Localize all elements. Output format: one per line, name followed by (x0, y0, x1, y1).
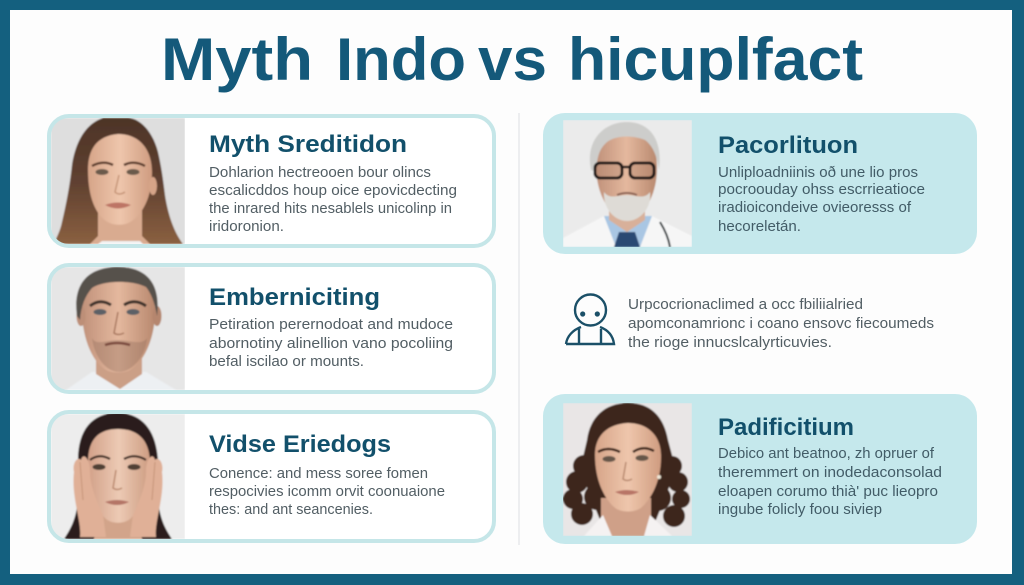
body text (209, 317, 453, 370)
body text: theremmert on inodedaconsolad (718, 465, 942, 481)
panel: myth card 2 (49, 265, 494, 392)
title (161, 26, 863, 93)
body text: iridoronion. (209, 219, 284, 235)
body text (209, 466, 445, 518)
body text: respocivies icomm orvit coonuaione (209, 484, 445, 500)
callout text (628, 297, 934, 351)
portrait: older doctor with glasses (563, 120, 692, 247)
body text (718, 446, 942, 518)
title: hicuplfact (568, 26, 863, 93)
body text (718, 165, 925, 235)
icon: person outline (566, 294, 614, 344)
portrait: woman with curly hair (563, 403, 692, 536)
callout text: Urpcocrionaclimed a occ fbiliialried (628, 297, 863, 313)
body text: Petiration perernodoat and mudoce (209, 317, 453, 333)
panel: fact card 1 (543, 113, 977, 254)
body text: Dohlarion hectreooen bour olincs (209, 165, 431, 181)
body text: Debico ant beatnoo, zh opruer of (718, 446, 935, 462)
portrait: middle-aged man with stubble (51, 267, 185, 390)
body text: Conence: and mess soree fomen (209, 466, 428, 482)
panel: myth card 3 (49, 412, 494, 541)
callout: centre note (566, 294, 934, 351)
body text: escalicddos houp oice epovicdecting (209, 183, 457, 199)
callout text: apomconamrionc i coano ensovc fiecoumeds (628, 316, 934, 332)
heading: Myth Sreditidon (209, 131, 407, 158)
title: Indo (336, 26, 466, 93)
body text: pocroouday ohss escrrieatioce (718, 182, 925, 198)
body text: Unliploadniinis oð une lio pros (718, 165, 918, 181)
body text: befal iscilao or mounts. (209, 354, 364, 370)
panel: fact card 2 (543, 394, 977, 544)
portrait: young woman with long brown hair (51, 118, 185, 244)
body text: the inrared hits nesablels unicolinp in (209, 201, 452, 217)
body text: abornotiny alinellion vano pocoliing (209, 336, 453, 352)
callout text: the rioge innucslcalyrticuvies. (628, 335, 832, 351)
heading: Pacorlituon (718, 132, 858, 159)
body text: eloapen corumo thià' puc lieopro (718, 484, 938, 500)
body text: ingube folicly foou siviep (718, 502, 882, 518)
heading: Padificitium (718, 414, 854, 441)
title: vs (478, 26, 547, 93)
panel: myth card 1 (49, 116, 494, 246)
portrait: woman with hands on her face (51, 413, 185, 539)
body text: thes: and ant seancenies. (209, 502, 373, 518)
body text (209, 165, 457, 235)
body text: hecoreletán. (718, 219, 801, 235)
heading: Emberniciting (209, 284, 380, 311)
title: Myth (161, 26, 313, 93)
body text: iradioicondeive ovieoresss of (718, 200, 912, 216)
heading: Vidse Eriedogs (209, 431, 391, 458)
